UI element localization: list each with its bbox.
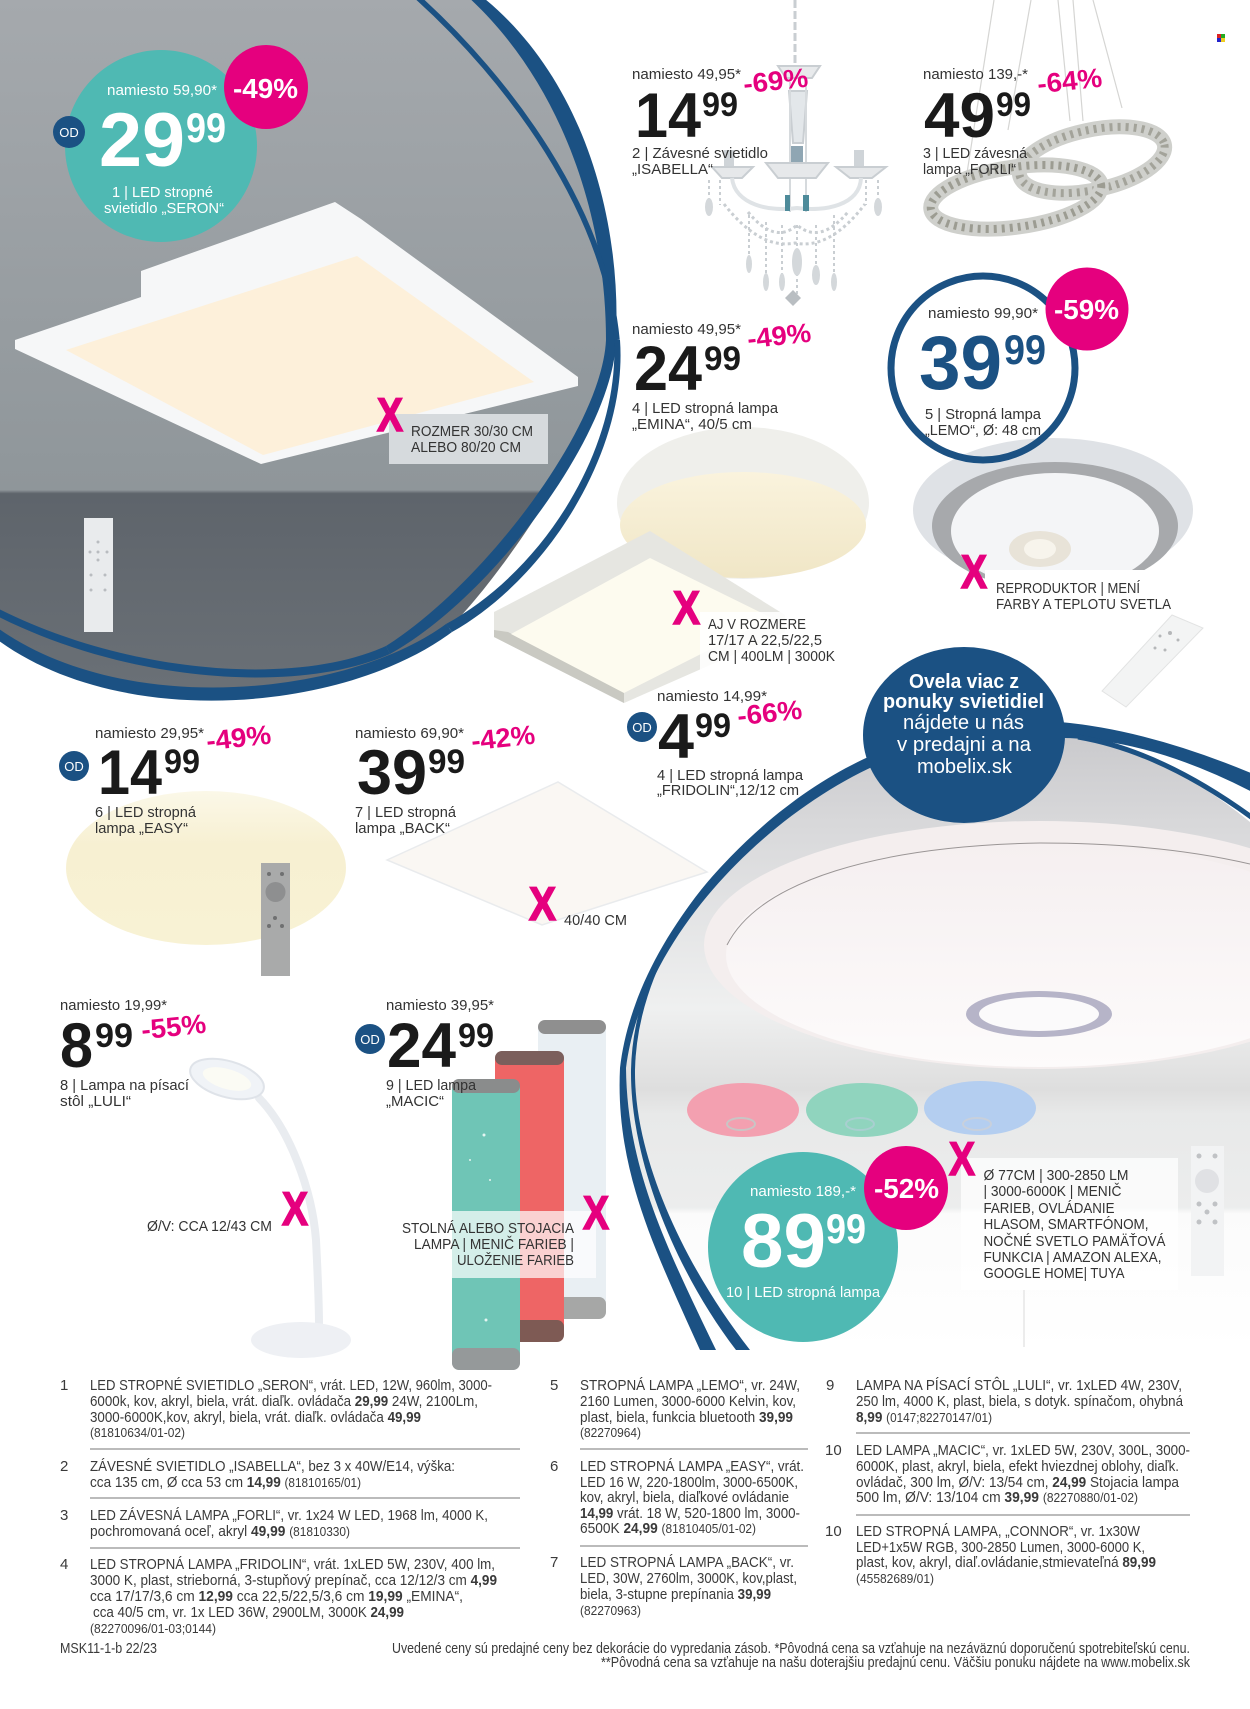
product: square lamp FRIDOLIN: 4 [658, 702, 694, 772]
product: pendant FORLI: -64% [1036, 63, 1103, 99]
spec list: column 2: LED 16 W, 220-1800lm, 3000-6500K, [580, 1474, 798, 1491]
product: ceiling lamp LEMO: „LEMO“, Ø: 48 cm [925, 422, 1041, 439]
product: desk lamp LULI: namiesto 19,99* [60, 997, 167, 1014]
product: square lamp FRIDOLIN: -66% [736, 695, 803, 731]
product: ceiling lamp EASY: 6 | LED stropná [95, 804, 197, 821]
spec list: column 3: 9 [826, 1377, 834, 1394]
badge: pink discount -52% [864, 1146, 948, 1230]
badge: teal price circle SERON: svietidlo „SERON“ [104, 200, 224, 217]
product: ceiling lamp EMINA: 4 | LED stropná lampa [632, 400, 779, 417]
spec list: column 2: LED, 30W, 2760lm, 3000K, kov,plast, [580, 1570, 797, 1587]
spec list: column 3: LAMPA NA PÍSACÍ STÔL „LULI“, vr. 1xLED 4W, 230V, [856, 1377, 1182, 1394]
product: chandelier ISABELLA: 2 | Závesné svietidlo [632, 145, 768, 162]
badge: teal price circle SERON: 1 | LED stropné [112, 184, 213, 201]
spec list: column 2: (82270963) [580, 1603, 641, 1618]
product: panel BACK: lampa „BACK“ [355, 820, 450, 837]
icon: pink lamp variant [687, 1083, 799, 1137]
icon: pink X marker: X [282, 1182, 308, 1235]
spec list: column 1: cca 40/5 cm, vr. 1x LED 36W, 2900LM, 3000K 24,99 [93, 1604, 404, 1621]
product: ceiling lamp LEMO: 5 | Stropná lampa [925, 406, 1042, 423]
spec list: column 1: LED ZÁVESNÁ LAMPA „FORLI“, vr. 1x24 W LED, 1968 lm, 4000 K, [90, 1507, 488, 1524]
product: square lamp FRIDOLIN: 99 [695, 707, 731, 745]
panel: room with large lamp CONNOR [625, 737, 1250, 1347]
spec list: column 3: 6000K, plast, akryl, biela, efekt hviezdnej oblohy, diaľk. [856, 1458, 1179, 1475]
product: desk lamp LULI: 8 [60, 1011, 93, 1081]
spec list: column 1: cca 17/17/3,6 cm 12,99 cca 22,5/22,5/3,6 cm 19,99 „EMINA“, [90, 1588, 463, 1605]
badge: teal price circle CONNOR: 89 [741, 1199, 826, 1284]
spec list: column 3: 10 [825, 1442, 842, 1459]
badge: teal price circle CONNOR: namiesto 189,-* [750, 1183, 856, 1200]
product: desk lamp LULI: 8 | Lampa na písací [60, 1077, 190, 1094]
product: chandelier ISABELLA: -69% [742, 63, 809, 99]
product: ceiling lamp LEMO [891, 268, 1203, 707]
product: chandelier ISABELLA [632, 0, 886, 306]
spec list: column 2: kov, akryl, biela, diaľkové ovládanie [580, 1489, 789, 1506]
spec list: column 1: 3000 K, plast, strieborná, 3-stupňový prepínač, cca 12/12/3 cm 4,99 [90, 1572, 497, 1589]
product: ceiling lamp LEMO: REPRODUKTOR | MENÍ [996, 580, 1140, 597]
icon: desk lamp [186, 1051, 351, 1358]
spec list: column 1: (82270096/01-03;0144) [90, 1621, 216, 1636]
spec list: column 3: LED+1x5W RGB, 300-2850 Lumen, 3000-6000 K, [856, 1539, 1145, 1556]
product: pendant FORLI: lampa „FORLI“ [923, 161, 1016, 178]
product: pendant FORLI [923, 0, 1171, 239]
spec list: column 1: LED STROPNÉ SVIETIDLO „SERON“, vrát. LED, 12W, 960lm, 3000- [90, 1377, 492, 1394]
spec list: column 1: 2 [60, 1458, 68, 1475]
product: panel BACK [355, 720, 707, 930]
spec list: column 1: LED STROPNÁ LAMPA „FRIDOLIN“, vrát. 1xLED 5W, 230V, 400 lm, [90, 1556, 495, 1573]
icon: pink X marker: X [583, 1186, 609, 1239]
label: size note: CM | 400LM | 3000K [708, 649, 835, 665]
spec list: column 1: 6000k, kov, akryl, biela, vrát. diaľk. ovládača 29,99 24W, 2100Lm, [90, 1393, 478, 1410]
spec list: column 1: 3000-6000K,kov, akryl, biela, vrát. diaľk. ovládača 49,99 [90, 1409, 421, 1426]
badge: teal price circle SERON [65, 50, 257, 242]
badge: pink discount -49%: -49% [233, 73, 298, 104]
spec list: column 1: 4 [60, 1556, 68, 1573]
product: desk lamp LULI: -55% [140, 1009, 207, 1045]
badge: OD: OD [59, 125, 79, 140]
spec list: column 3: LED STROPNÁ LAMPA, „CONNOR“, vr. 1x30W [856, 1523, 1141, 1540]
spec list: column 1: (81810634/01-02) [90, 1425, 185, 1440]
product: square lamp FRIDOLIN: „FRIDOLIN“,12/12 cm [657, 782, 799, 799]
spec list: column 3: plast, kov, akryl, diaľ.ovládanie,stmievateľná 89,99 [856, 1554, 1156, 1571]
footer: legal text: MSK11-1-b 22/23 [60, 1640, 157, 1657]
product: ceiling lamp LEMO: namiesto 99,90* [928, 305, 1038, 322]
badge: pink discount -52%: -52% [874, 1173, 939, 1204]
icon: print color mark [1217, 34, 1225, 42]
icon: LED panel SERON [15, 202, 578, 464]
spec list: column 3: 500 lm, Ø/V: 13/104 cm 39,99 (82270880/01-02) [856, 1489, 1138, 1506]
arcs: blue swooshes around large lamp [620, 722, 1250, 1350]
product: column lamps MACIC: OD [360, 1032, 380, 1047]
spec list: column 2 [550, 1377, 808, 1618]
icon: panel lamp [387, 782, 707, 925]
spec list: column 1: ZÁVESNÉ SVIETIDLO „ISABELLA“, bez 3 x 40W/E14, výška: [90, 1458, 455, 1475]
icon: round lamp LEMO [913, 438, 1200, 620]
label: size note [700, 612, 835, 672]
product: panel BACK: 40/40 CM [564, 913, 627, 929]
ring: navy price circle [891, 276, 1075, 460]
spec box [961, 1158, 1178, 1290]
product: ceiling lamp EASY: -49% [205, 720, 272, 756]
spec list: column 1: 1 [60, 1377, 68, 1394]
product: pendant FORLI: 99 [996, 86, 1031, 124]
spec list: column 2: biela, 3-stupne prepínania 39,99 [580, 1586, 771, 1603]
badge: teal price circle SERON: namiesto 59,90* [107, 82, 217, 99]
label box: dimensions: ALEBO 80/20 CM [411, 440, 521, 456]
icon: chandelier [705, 0, 886, 306]
icon: remote [1191, 1146, 1224, 1276]
product: desk lamp LULI: Ø/V: CCA 12/43 CM [147, 1219, 272, 1235]
label: size note: 17/17 A 22,5/22,5 [708, 633, 822, 649]
spec list: column 3 [825, 1377, 1190, 1586]
icon: white remote [84, 518, 113, 632]
icon: pink X marker: X [949, 1132, 975, 1185]
spec box: FARIEB, OVLÁDANIE [984, 1200, 1115, 1217]
spec list: column 2: 2160 Lumen, 3000-6000 Kelvin, kov, [580, 1393, 796, 1410]
spec list: column 2: 7 [550, 1554, 558, 1571]
product: pendant FORLI: namiesto 139,-* [923, 66, 1028, 83]
label box: lamp note [402, 1211, 596, 1278]
label box: dimensions [389, 414, 548, 464]
icon: white column [538, 1020, 606, 1319]
product: column lamps MACIC: „MACIC“ [386, 1093, 444, 1110]
footer: legal text [60, 1640, 1190, 1671]
badge: blue info circle: v predajni a na [897, 733, 1032, 756]
product: panel BACK: -42% [470, 720, 536, 756]
spec list: column 3: 8,99 (0147;82270147/01) [856, 1409, 992, 1426]
product: ceiling lamp EASY: 14 [98, 738, 162, 808]
spec list: column 2: STROPNÁ LAMPA „LEMO“, vr. 24W, [580, 1377, 800, 1394]
product: column lamps MACIC: 99 [458, 1017, 494, 1055]
post: wall detail [1023, 1290, 1025, 1347]
product: ceiling lamp EASY [59, 720, 346, 976]
spec list: column 2: LED STROPNÁ LAMPA „EASY“, vrát. [580, 1458, 804, 1475]
badge: teal price circle SERON: 29 [99, 98, 185, 183]
icon: pink X marker: X [673, 581, 700, 634]
product: ceiling lamp LEMO: 39 [919, 321, 1002, 406]
icon: red column [495, 1051, 564, 1342]
product: square lamp FRIDOLIN: namiesto 14,99* [657, 688, 767, 705]
product: chandelier ISABELLA: namiesto 49,95* [632, 66, 741, 83]
product: chandelier ISABELLA: „ISABELLA“ [632, 161, 713, 178]
panel: gray room with LED panel SERON [0, 0, 611, 694]
spec box: FUNKCIA | AMAZON ALEXA, [984, 1250, 1162, 1266]
icon: blue lamp variant [924, 1081, 1036, 1135]
badge: blue info circle [863, 647, 1065, 823]
spec box: GOOGLE HOME| TUYA [984, 1266, 1125, 1282]
icon: square lamp [494, 531, 785, 703]
icon: gray remote [261, 863, 290, 976]
label box: dimensions: ROZMER 30/30 CM [411, 424, 533, 440]
badge: blue info circle: nájdete u nás [903, 711, 1024, 734]
product: desk lamp LULI [60, 997, 351, 1358]
spec list: column 1: 3 [60, 1507, 68, 1524]
product: square lamp FRIDOLIN [494, 531, 835, 799]
product: square lamp FRIDOLIN: 4 | LED stropná lampa [657, 767, 804, 784]
icon: rotated white remote [1102, 615, 1203, 707]
badge: pink discount -49% [224, 45, 308, 129]
badge: pink discount -59% [1046, 268, 1128, 350]
spec list: column 3: 10 [825, 1523, 842, 1540]
label box: lamp note: ULOŽENIE FARIEB [457, 1252, 574, 1269]
spec list: column 3: ovládač, 300 lm, Ø/V: 13/54 cm, 24,99 Stojacia lampa [856, 1474, 1180, 1491]
product: column lamps MACIC [355, 997, 609, 1370]
product: ceiling lamp EMINA [617, 318, 869, 579]
product: ceiling lamp EMINA: 99 [704, 340, 741, 378]
badge: blue info circle: Ovela viac z [909, 670, 1019, 693]
badge: teal price circle CONNOR [708, 1152, 898, 1342]
spec box: | 3000-6000K | MENIČ [984, 1183, 1122, 1200]
badge: teal price circle CONNOR: 10 | LED stropná lampa [726, 1284, 881, 1301]
product: panel BACK: 7 | LED stropná [355, 804, 457, 821]
spec list: column 2: 6 [550, 1458, 558, 1475]
badge: blue info circle: ponuky svietidiel [883, 690, 1044, 713]
spec list: column 2: 14,99 vrát. 18 W, 520-1800 lm, 3000- [580, 1505, 800, 1522]
spec box: NOČNÉ SVETLO PAMÄŤOVÁ [984, 1233, 1166, 1250]
product: column lamps MACIC: 24 [387, 1011, 456, 1081]
icon: round lamp EMINA [617, 427, 869, 579]
product: chandelier ISABELLA: 14 [635, 81, 701, 151]
product: ceiling lamp EASY: lampa „EASY“ [95, 820, 188, 837]
label box: lamp note: LAMPA | MENIČ FARIEB | [414, 1236, 574, 1253]
product: pendant FORLI: 49 [924, 81, 995, 151]
icon: round lamp EASY [66, 791, 346, 945]
product: ceiling lamp EASY: 99 [164, 743, 200, 781]
product: ceiling lamp EMINA: „EMINA“, 40/5 cm [632, 416, 752, 433]
badge: blue info circle: mobelix.sk [917, 755, 1013, 778]
spec list: column 2: (82270964) [580, 1425, 641, 1440]
badge: teal price circle CONNOR: 99 [826, 1205, 866, 1252]
label: size note: AJ V ROZMERE [708, 617, 806, 633]
product: desk lamp LULI: stôl „LULI“ [60, 1093, 131, 1110]
product: panel BACK: 99 [428, 743, 465, 781]
product: panel BACK: namiesto 69,90* [355, 725, 464, 742]
icon: teal column [452, 1079, 520, 1370]
product: ceiling lamp EMINA: 24 [634, 334, 702, 404]
icon: pink X marker: X [529, 877, 556, 930]
arcs: blue swooshes around gray panel [0, 0, 621, 701]
badge: teal price circle SERON: 99 [186, 104, 226, 151]
product: ceiling lamp LEMO: FARBY A TEPLOTU SVETLA [996, 597, 1171, 613]
spec list: column 3: 250 lm, 4000 K, plast, biela, s dotyk. spínačom, ohybná [856, 1393, 1184, 1410]
product: ceiling lamp EASY: namiesto 29,95* [95, 725, 204, 742]
spec list: column 2: 5 [550, 1377, 558, 1394]
product: ceiling lamp EASY: OD [64, 759, 84, 774]
product: ceiling lamp LEMO: 99 [1004, 326, 1046, 373]
icon: large lamp [704, 821, 1250, 1069]
spec list: column 1: pochromovaná oceľ, akryl 49,99 (81810330) [90, 1523, 350, 1540]
product: panel BACK: 39 [357, 738, 427, 808]
product: pendant FORLI: 3 | LED závesná [923, 145, 1028, 162]
product: column lamps MACIC: 9 | LED lampa [386, 1077, 477, 1094]
badge: pink discount -59%: -59% [1054, 294, 1119, 325]
product: ceiling lamp EMINA: namiesto 49,95* [632, 321, 741, 338]
spec list: column 1: cca 135 cm, Ø cca 53 cm 14,99 (81810165/01) [90, 1474, 361, 1491]
badge: OD [53, 116, 85, 148]
icon: green lamp variant [806, 1083, 918, 1137]
spec list: column 2: LED STROPNÁ LAMPA „BACK“, vr. [580, 1554, 794, 1571]
product: desk lamp LULI: 99 [95, 1017, 133, 1055]
product: chandelier ISABELLA: 99 [702, 86, 738, 124]
label box: lamp note: STOLNÁ ALEBO STOJACIA [402, 1220, 574, 1237]
spec box: Ø 77CM | 300-2850 LM [984, 1168, 1128, 1184]
spec list: column 1 [60, 1377, 520, 1636]
spec list: column 2: 6500K 24,99 (81810405/01-02) [580, 1520, 756, 1537]
icon: pink X marker: X [961, 545, 987, 598]
product: column lamps MACIC: namiesto 39,95* [386, 997, 494, 1014]
spec list: column 2: plast, biela, funkcia bluetooth 39,99 [580, 1409, 793, 1426]
icon: pink X marker: X [377, 388, 403, 441]
product: square lamp FRIDOLIN: OD [632, 720, 652, 735]
spec box: HLASOM, SMARTFÓNOM, [984, 1216, 1148, 1233]
spec list: column 3: LED LAMPA „MACIC“, vr. 1xLED 5W, 230V, 300L, 3000- [856, 1442, 1190, 1459]
spec list: column 3: (45582689/01) [856, 1571, 934, 1586]
icon: crystal rings [927, 0, 1171, 239]
product: ceiling lamp EMINA: -49% [746, 318, 812, 354]
